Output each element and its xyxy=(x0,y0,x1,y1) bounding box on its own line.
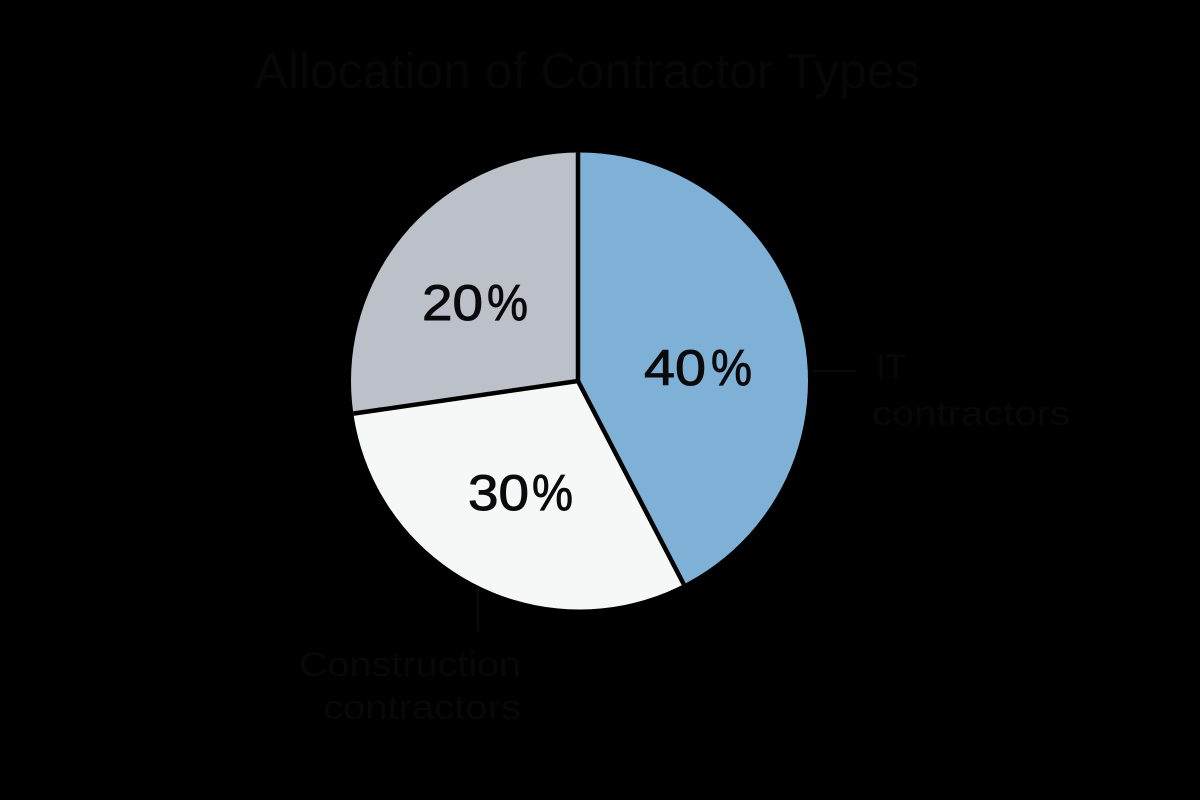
leader line: IT contractors xyxy=(813,370,856,372)
label: IT contractors: IT xyxy=(876,348,906,386)
title: Allocation of Contractor Types xyxy=(254,43,920,99)
slice: Construction contractors 30% xyxy=(353,384,684,610)
value: 20%: 20 xyxy=(422,275,483,331)
infographic canvas xyxy=(351,152,856,631)
label: Construction contractors: Construction xyxy=(299,646,521,684)
percent sign: 20%: % xyxy=(487,274,528,331)
label: Construction contractors: contractors xyxy=(323,689,521,727)
label: IT contractors: contractors xyxy=(872,395,1070,433)
slice dividers xyxy=(353,152,686,586)
value: 40%: 40 xyxy=(644,340,706,396)
percent sign: 40%: % xyxy=(711,339,752,396)
leader line: Construction contractors xyxy=(477,590,479,631)
slice: other 20% xyxy=(351,152,578,414)
label: Construction contractors xyxy=(299,646,521,727)
value: 30%: 30 xyxy=(468,465,529,521)
pie chart xyxy=(351,152,808,610)
percent sign: 30%: % xyxy=(532,464,573,521)
label: IT contractors xyxy=(872,348,1070,433)
slices xyxy=(351,152,808,610)
slice: IT contractors 40% xyxy=(578,152,808,584)
